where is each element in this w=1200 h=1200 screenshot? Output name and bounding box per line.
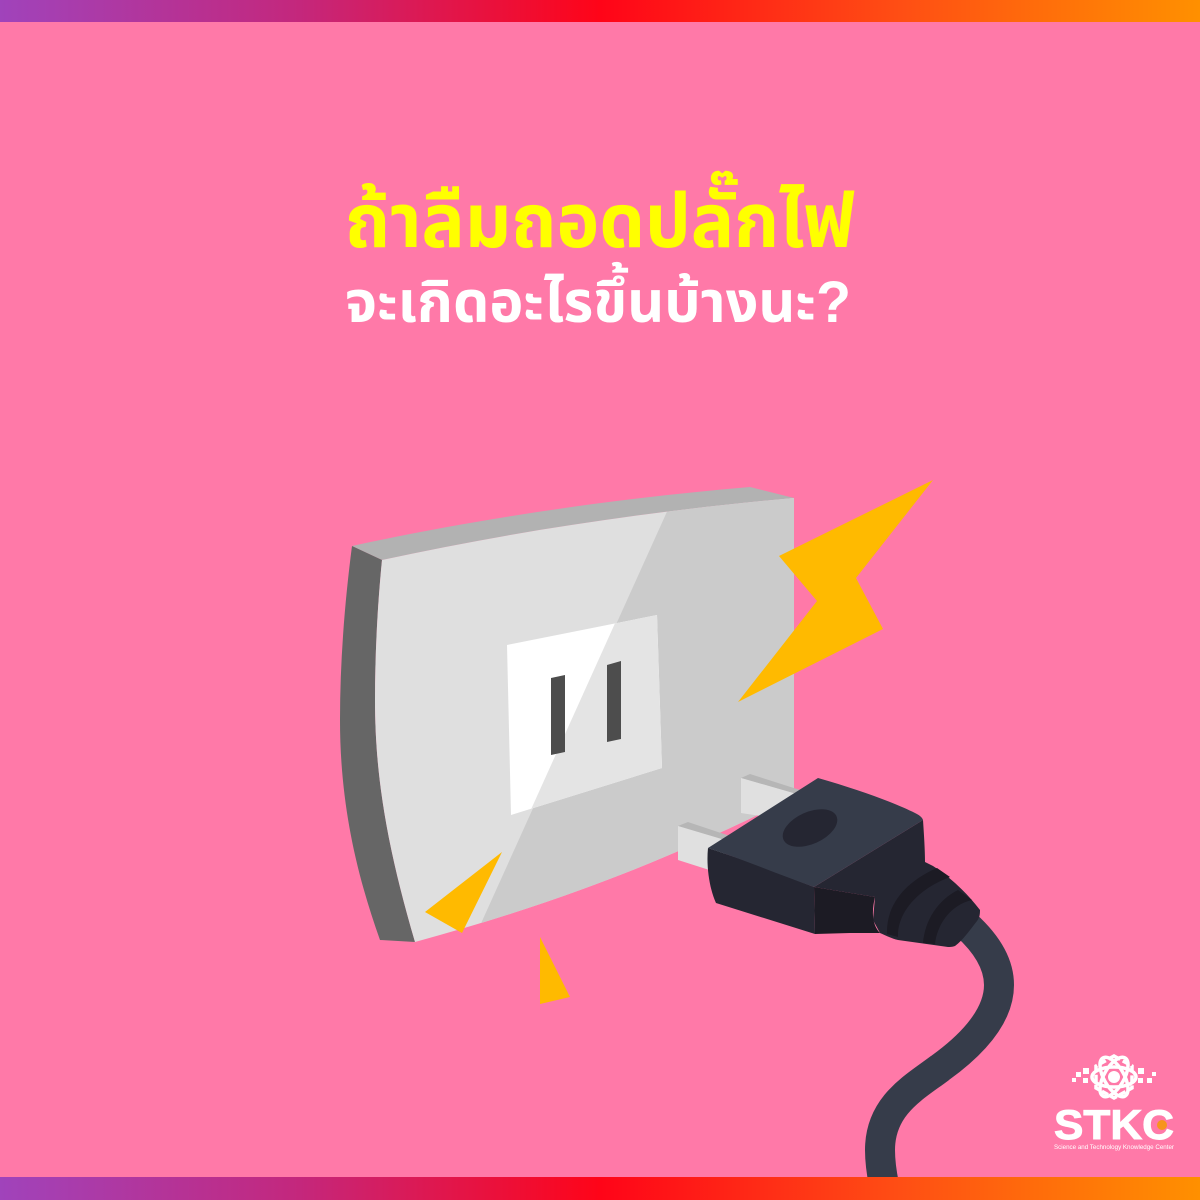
top gradient bar [0,0,1200,22]
logo side dots [1072,1068,1156,1083]
spark left [425,852,502,933]
power cord [880,925,999,1185]
logo tagline: Science and Technology Knowledge Center [1054,1145,1174,1151]
plug oval recess [777,802,843,854]
title [345,171,855,335]
plug left side [707,848,815,934]
socket plate left edge [340,546,415,942]
logo: STKC [1054,1053,1174,1151]
lightning bolt [738,480,933,702]
plug top face [708,778,923,887]
logo orange dot [1157,1120,1167,1130]
title: จะเกิดอะไรขึ้นบ้างนะ? [345,261,851,335]
logo wordmark: STKC [1054,1101,1174,1148]
logo atom icon [1092,1053,1136,1101]
outlet face with slots [507,615,662,815]
plug [678,774,980,947]
spark bottom [540,937,570,1004]
plug shadow side [814,887,880,934]
socket plate front [375,498,794,942]
plug rear body [814,820,980,947]
title: ถ้าลืมถอดปลั๊กไฟ [345,171,855,264]
bottom gradient bar [0,1177,1200,1200]
socket plate top edge [352,487,794,560]
plug grip band 1 [887,868,950,937]
illustration: wall socket [340,487,794,942]
plug grip band 2 [923,890,972,944]
prong lower [678,822,730,875]
prong upper [741,774,800,822]
